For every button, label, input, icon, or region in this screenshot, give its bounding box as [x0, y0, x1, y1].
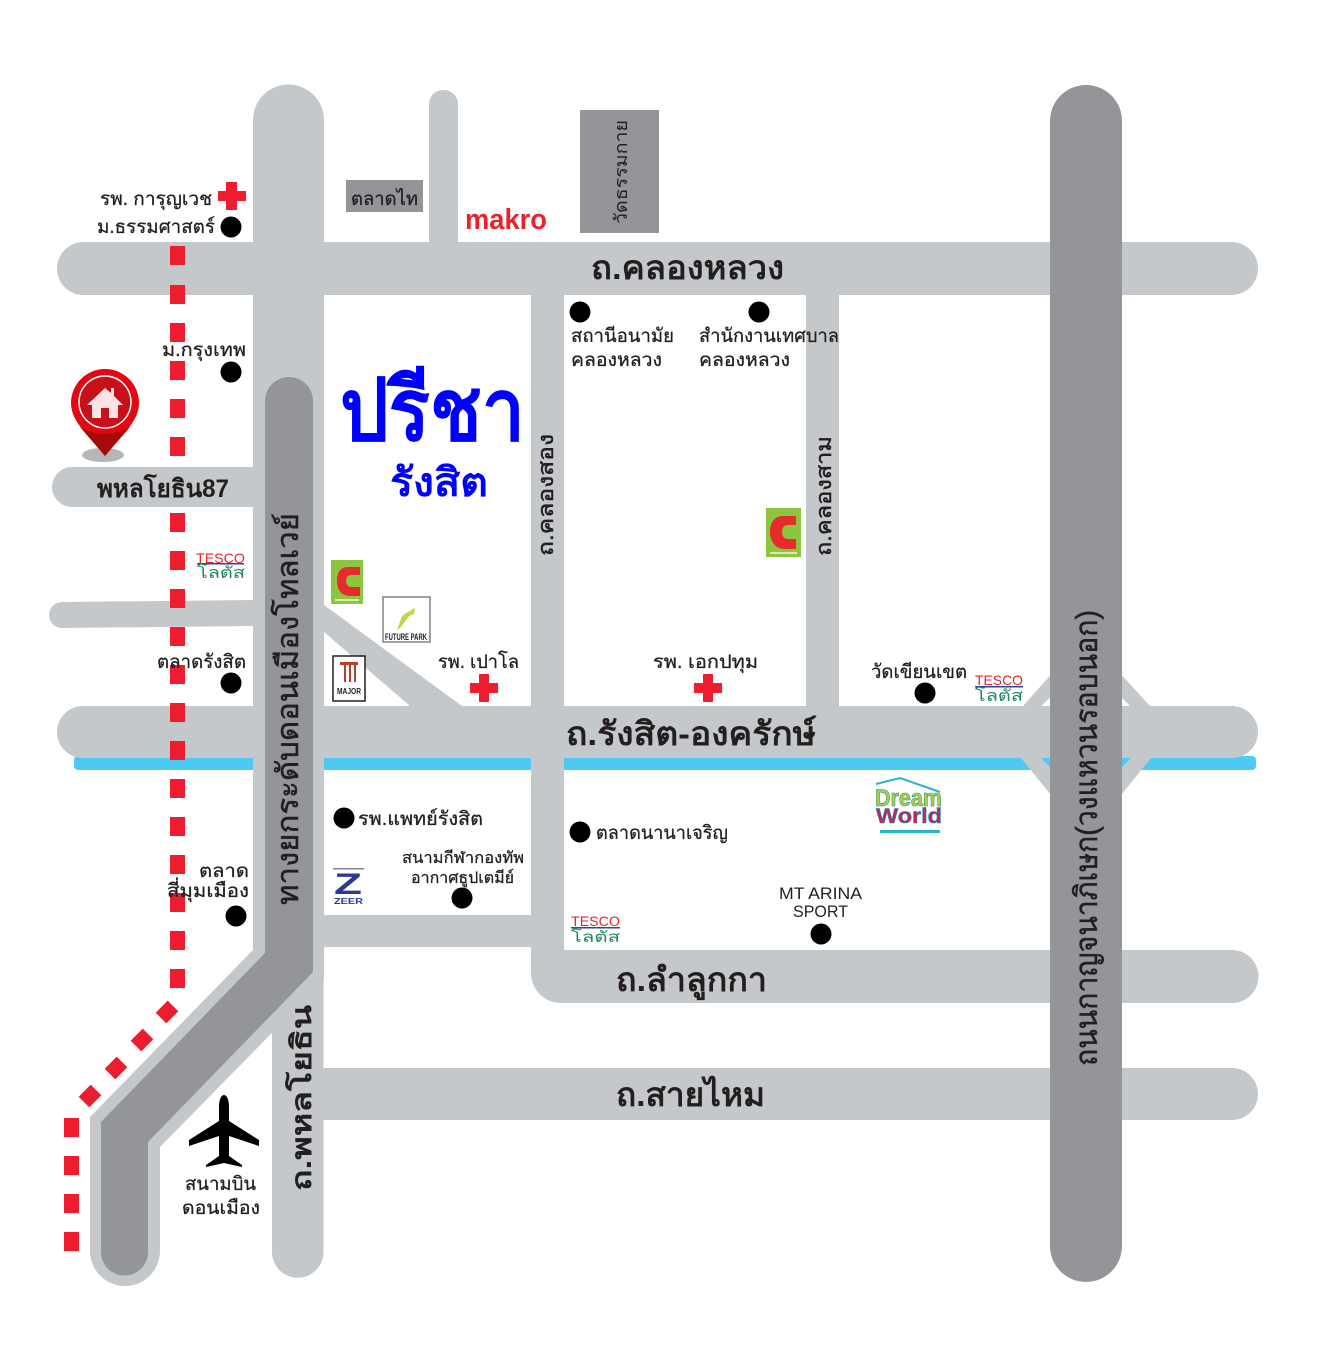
municipal office: สำนักงานเทศบาล: [699, 326, 839, 347]
landmark: Talad Thai: [346, 180, 423, 212]
market: Si Mum Mueang: ตลาด: [199, 861, 249, 882]
logo: Future Park: [383, 597, 430, 642]
venue: MT Arina Sport: MT ARINA: [779, 884, 863, 903]
logo: Tesco Lotus bottom: TESCO: [571, 913, 620, 929]
logo: Big C left: [331, 560, 363, 604]
temple: Wat Khian Khet: [871, 661, 967, 704]
logo: Dream World: World: [876, 805, 942, 828]
market: Rangsit: [157, 652, 246, 694]
elevated tollway: [101, 377, 313, 1275]
logo: Tesco Lotus right: [975, 672, 1023, 705]
municipal office: คลองหลวง: [699, 350, 790, 371]
logo: Dream World: [875, 778, 942, 833]
temple: Wat Khian Khet: วัดเขียนเขต: [871, 661, 967, 683]
label: Don Mueang airport: [182, 1174, 260, 1219]
road name: Lam Luk Ka: ถ.ลำลูกกา: [616, 961, 767, 1001]
market: Si Mum Mueang: [167, 861, 249, 926]
label: Don Mueang airport: ดอนเมือง: [182, 1198, 260, 1219]
title: [340, 363, 525, 505]
market: Rangsit: ตลาดรังสิต: [157, 652, 246, 673]
logo: Tesco Lotus right: TESCO: [975, 672, 1023, 688]
title: รังสิต: [390, 461, 488, 505]
hospital: Ek Pathum: รพ. เอกปทุม: [653, 652, 758, 674]
logo: Zeer: ZEER: [334, 897, 363, 906]
road name: Phahonyothin 87: พหลโยธิน87: [97, 473, 229, 503]
health station: [570, 302, 674, 371]
logo: Tesco Lotus bottom: [571, 913, 620, 946]
market: Si Mum Mueang: สี่มุมเมือง: [167, 877, 249, 903]
icon: home location pin: [71, 369, 139, 462]
canal: [74, 756, 1256, 770]
road name: Sai Mai: ถ.สายไหม: [616, 1075, 765, 1113]
logo: Zeer: Z: [334, 868, 362, 901]
university: Bangkok: ม.กรุงเทพ: [162, 340, 246, 362]
hospital: Paolo: รพ. เปาโล: [438, 650, 519, 673]
market: Nana Charoen: ตลาดนานาเจริญ: [596, 823, 728, 844]
logo: makro: makro: [465, 204, 547, 236]
road name: Phahonyothin: ถ.พหลโยธิน: [284, 1005, 317, 1191]
logo: Tesco Lotus left: TESCO: [196, 550, 245, 566]
stadium: Air Force: อากาศธูปเตมีย์: [411, 868, 514, 888]
university: Thammasat: ม.ธรรมศาสตร์: [97, 216, 215, 238]
landmark: Wat Dhammakaya: [580, 110, 659, 233]
landmark: Talad Thai: ตลาดไท: [351, 188, 418, 210]
road name: Rangsit-Ongkharak: ถ.รังสิต-องครักษ์: [566, 715, 817, 752]
hospital: Phaet Rangsit: รพ.แพทย์รังสิต: [358, 808, 483, 830]
municipal office: [699, 302, 839, 371]
label: Don Mueang airport: สนามบิน: [185, 1174, 256, 1195]
logo: Tesco Lotus left: [196, 550, 245, 582]
logo: Zeer: [333, 868, 364, 906]
hospital: Karunvej: [100, 182, 246, 211]
logo: Big C right: [766, 508, 801, 557]
road name: Kanchanaphisek ring road: ถนนกาญจนาภิเษก(วงแหวนรอบนอก): [1069, 610, 1104, 1066]
title: ปรีชา: [340, 363, 525, 459]
health station: คลองหลวง: [571, 350, 662, 371]
hospital: Karunvej: รพ. การุญเวช: [100, 189, 212, 211]
stadium: Air Force: สนามกีฬากองทัพ: [402, 849, 524, 867]
hospital: Paolo: [438, 650, 519, 702]
road name: Khlong 2: ถ.คลองสอง: [535, 434, 558, 556]
stadium: Air Force: [402, 849, 524, 908]
logo: Future Park: FUTURE PARK: [385, 632, 427, 642]
road name: Khlong Luang: ถ.คลองหลวง: [591, 249, 784, 286]
university: Bangkok: [162, 340, 246, 382]
road name: Don Mueang tollway: ทางยกระดับดอนเมืองโทลเวย์: [270, 513, 305, 905]
logo: Dream World: Dream: [875, 785, 942, 812]
health station: สถานีอนามัย: [571, 325, 674, 347]
ring road: [1050, 85, 1122, 1282]
venue: MT Arina Sport: [779, 884, 863, 944]
logo: Major: MAJOR: [337, 687, 361, 696]
logo: Major: [333, 656, 365, 701]
hospital: Ek Pathum: [653, 652, 758, 702]
venue: MT Arina Sport: SPORT: [793, 902, 848, 921]
logo: Tesco Lotus left: โลตัส: [197, 563, 245, 582]
red dashed rail line: [64, 246, 185, 1251]
logo: Tesco Lotus right: โลตัส: [975, 686, 1023, 705]
road name: Khlong 3: ถ.คลองสาม: [813, 436, 836, 556]
landmark: Wat Dhammakaya: วัดธรรมกาย: [611, 120, 631, 224]
icon: airplane: [189, 1095, 259, 1167]
logo: Tesco Lotus bottom: โลตัส: [571, 928, 620, 946]
